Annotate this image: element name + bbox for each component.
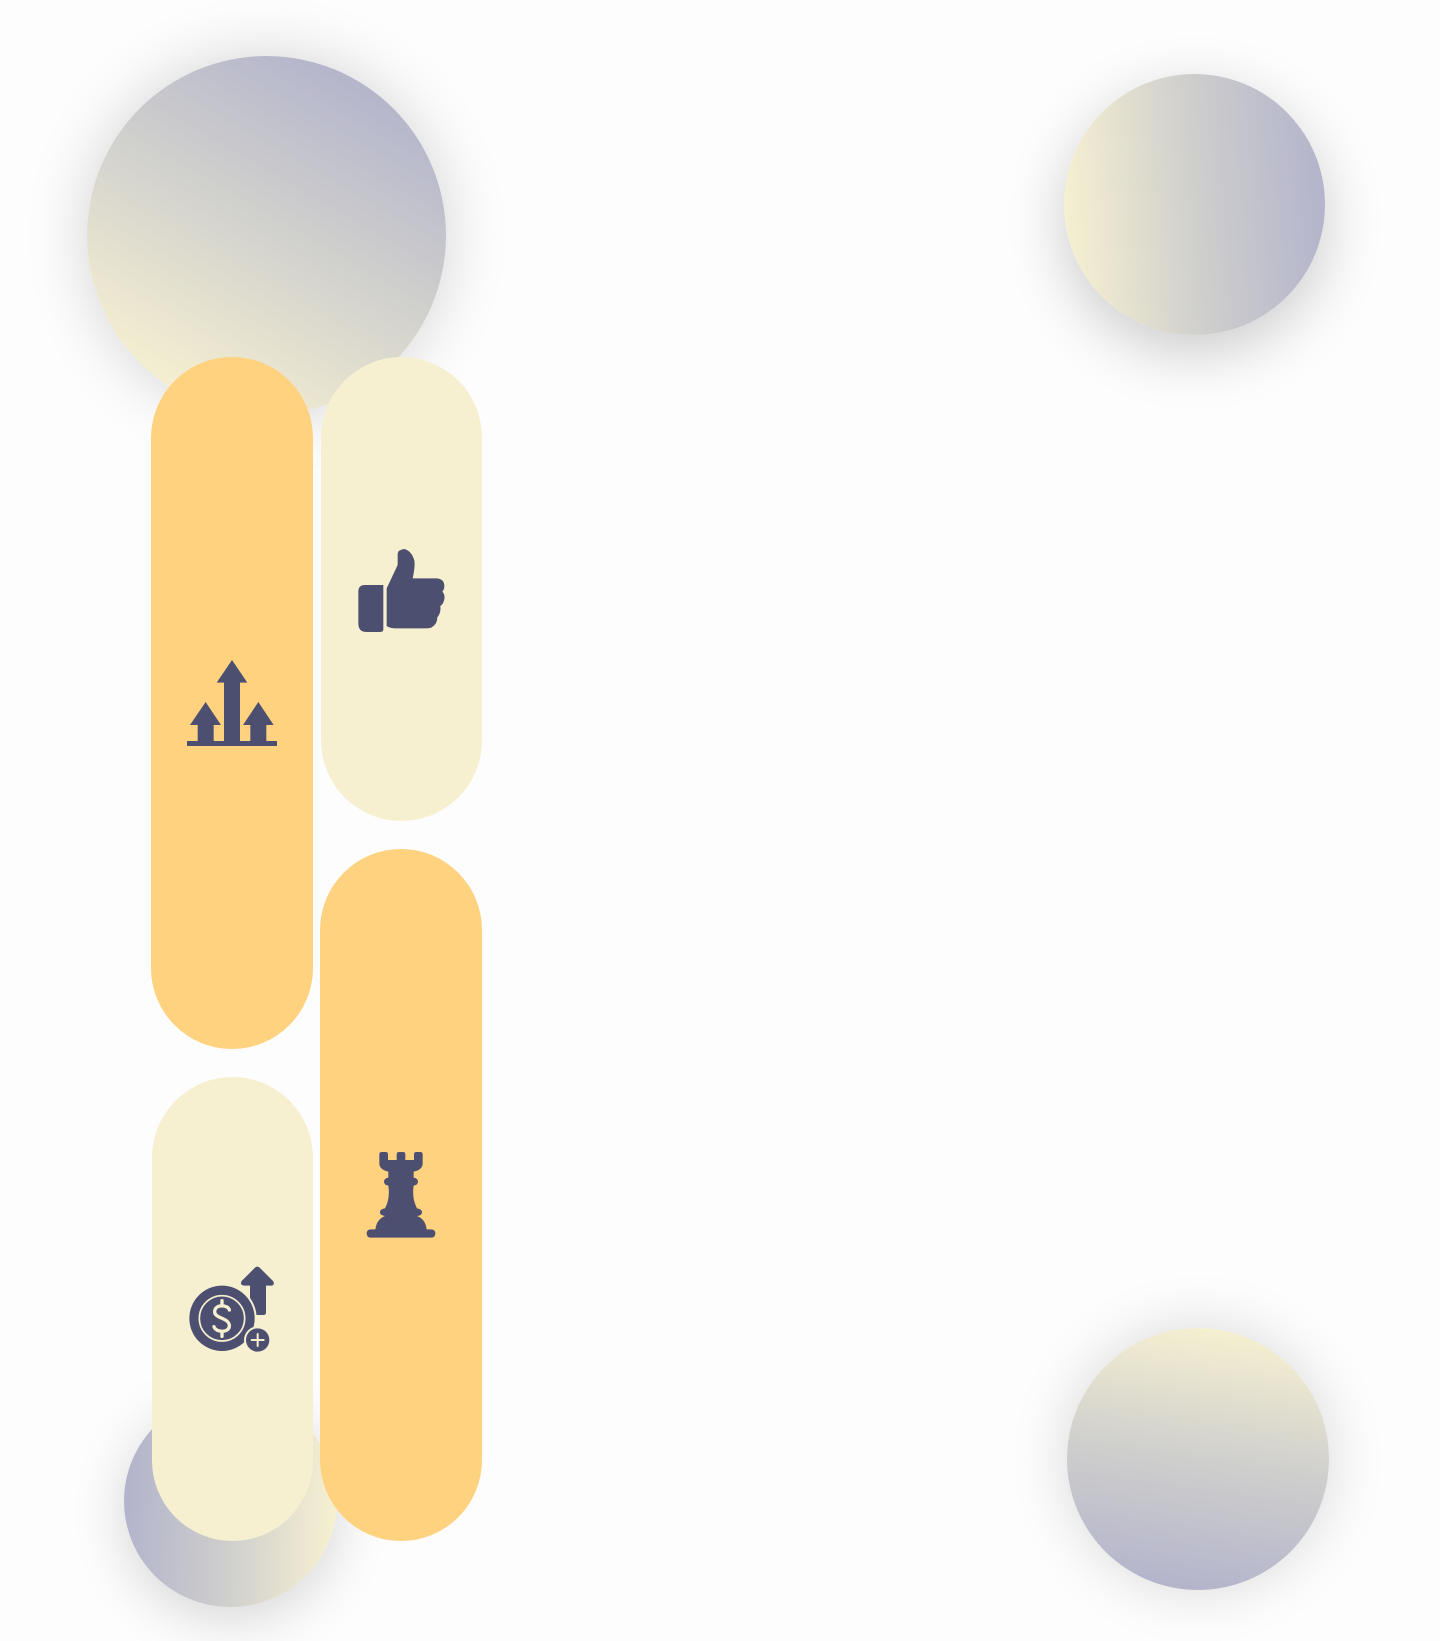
circle: bottom-left gradient [124,1395,337,1607]
icon: dollar coin with up arrow and plus [189,1266,274,1352]
icon: chess rook [366,1152,436,1238]
panel: tall orange pill with rook [320,849,482,1541]
circle: bottom-right gradient [1067,1328,1329,1590]
icon: thumbs up [358,549,445,632]
icon: three rising arrows [187,660,277,746]
circle: top-left gradient [86,56,446,415]
circle: top-right gradient [1064,74,1325,335]
panel: tall orange pill with growth arrows [151,357,313,1049]
panel: short cream pill with money growth [152,1077,313,1541]
panel: short cream pill with thumbs up [320,357,482,820]
